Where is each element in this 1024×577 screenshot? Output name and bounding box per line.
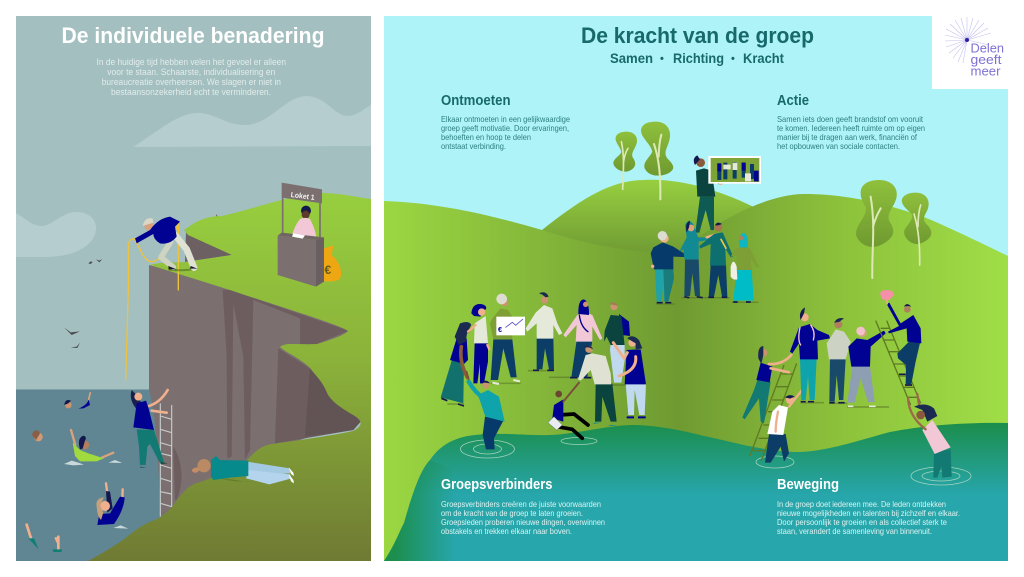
subtitle: • (660, 53, 664, 65)
section: beweging: staan, verandert de samenleving van binnenuit. (777, 527, 932, 536)
section: groepsverbinders (441, 477, 605, 536)
birds lower (64, 327, 80, 348)
section: groepsverbinders: obstakels en trekken elkaar naar boven. (441, 527, 572, 536)
subtitle: Richting (673, 50, 724, 66)
section: beweging: nieuwe mogelijkheden en talenten bij zichzelf en elkaar. (777, 509, 960, 518)
section: ontmoeten (441, 93, 570, 151)
group: meeting circle (441, 292, 646, 449)
section: groepsverbinders: Groepsleden proberen nieuwe dingen, overwinnen (441, 518, 605, 527)
back hill middle (542, 180, 760, 300)
left intro text (96, 57, 286, 97)
woman in long skirt (441, 322, 471, 406)
cloud: upper right (133, 96, 371, 147)
person with teal hood (679, 221, 715, 298)
front hills (384, 194, 1008, 561)
subtitle: Samen (610, 50, 653, 66)
section: beweging: Door persoonlijk te groeien en als collectief sterk te (777, 518, 947, 527)
woman hijab pink (563, 299, 602, 378)
left title: De individuele benadering (62, 23, 324, 48)
logo wordmark: Delen (970, 42, 1004, 56)
group: meeting circle: € (498, 325, 502, 334)
rope end (126, 290, 128, 380)
sky background (16, 16, 371, 561)
cliff rock (149, 214, 366, 517)
water ripples (460, 438, 971, 485)
section: beweging: Beweging (777, 477, 839, 493)
tree right large (856, 180, 897, 278)
man reaching down (578, 345, 619, 426)
right title: De kracht van de groep (581, 23, 814, 48)
person with key (699, 223, 733, 297)
left intro text: bestaansonzekerheid echt te verminderen. (111, 87, 271, 97)
lying man (192, 456, 294, 484)
man grey shirt (827, 318, 851, 403)
logo: delen geeft meer (932, 16, 1008, 89)
left intro text: voor te staan. Schaarste, individualisering en (107, 67, 275, 77)
sunburst icon (945, 17, 991, 63)
man in water reaching (467, 372, 505, 449)
woman in water (908, 394, 952, 478)
section: actie: te komen. Iedereen heeft ruimte om op eigen (777, 124, 925, 133)
subtitle: Kracht (743, 50, 784, 66)
man with backpack straps (790, 307, 830, 402)
group: movement with ladders (742, 290, 952, 478)
money bag (324, 246, 341, 281)
shadow (657, 298, 758, 304)
section: groepsverbinders: om de kracht van de groep te laten groeien. (441, 509, 583, 518)
panel: de individuele benadering (16, 16, 371, 561)
water (16, 390, 200, 561)
sitting woman with laptop (548, 383, 588, 438)
birds upper (88, 259, 102, 264)
woman white top (468, 304, 489, 383)
woman blue top (613, 336, 646, 417)
counter: loket 1: Loket 1 (290, 190, 315, 202)
section: actie: het opbouwen van sociale contacten. (777, 142, 900, 151)
section: beweging (777, 477, 960, 536)
woman on ladder (131, 390, 168, 468)
man on right ladder with piggy bank (880, 290, 921, 385)
tree left small (613, 132, 637, 189)
rope and climber (128, 217, 197, 290)
person white hair (651, 231, 692, 303)
section: ontmoeten: Elkaar ontmoeten in een gelijkwaardige (441, 115, 570, 124)
swimmer with raised arm (64, 393, 90, 409)
section: ontmoeten: Ontmoeten (441, 93, 510, 109)
section: ontmoeten: behoeften en hoop te delen (441, 133, 531, 142)
logo wordmark: geeft (970, 53, 1002, 67)
tree left large (641, 122, 673, 199)
person on shoulders (694, 155, 723, 233)
clerk (292, 206, 317, 238)
group: action (651, 155, 761, 304)
man with backpack (604, 302, 630, 383)
woman in blue reaching up (96, 483, 128, 529)
woman pink hair (847, 327, 886, 406)
left intro text: bureaucreatie overheersen. We slagen er niet in (102, 77, 281, 87)
grass cliff top (88, 193, 371, 561)
picture frame (708, 156, 761, 184)
section: ontmoeten: groep geeft motivatie. Door ervaringen, (441, 124, 569, 133)
subtitle: • (731, 53, 735, 65)
ladder on cliff (160, 403, 172, 517)
shadows (447, 371, 627, 404)
left ladder (750, 363, 797, 461)
left intro text: In de huidige tijd hebben velen het gevoel er alleen (96, 57, 286, 67)
water (384, 423, 1008, 561)
tree right small (902, 193, 931, 265)
section: actie (777, 93, 925, 151)
section: groepsverbinders: Groepsverbinders (441, 477, 552, 493)
panel: de kracht van de groep (384, 16, 1008, 561)
sky (384, 16, 1008, 561)
section: beweging: In de groep doet iedereen mee. De leden ontdekken (777, 500, 946, 509)
piggy bank (880, 290, 894, 300)
counter: loket 1: € (324, 263, 332, 277)
man in cream hoodie (526, 292, 562, 370)
section: actie: manier bij te dragen aan werk, financiën of (777, 133, 918, 142)
drowning head (32, 430, 43, 441)
water left tint (384, 460, 455, 561)
woman with cyan hijab (731, 233, 759, 302)
section: groepsverbinders: Groepsverbinders creëren de juiste voorwaarden (441, 500, 601, 509)
hands in water (27, 525, 62, 552)
logo wordmark (970, 42, 1004, 78)
counter: loket 1 (278, 183, 341, 287)
logo wordmark: meer (970, 64, 1000, 78)
cloud: left (16, 212, 96, 257)
right ladder (876, 321, 921, 405)
man in white shirt (765, 388, 803, 463)
swimmer in green (64, 430, 122, 465)
person with chart (490, 294, 525, 384)
subtitle (610, 50, 784, 66)
woman climbing left ladder (742, 346, 791, 423)
section: ontmoeten: ontstaat verbinding. (441, 142, 506, 151)
section: actie: Samen iets doen geeft brandstof om vooruit (777, 115, 924, 124)
section: actie: Actie (777, 93, 809, 109)
